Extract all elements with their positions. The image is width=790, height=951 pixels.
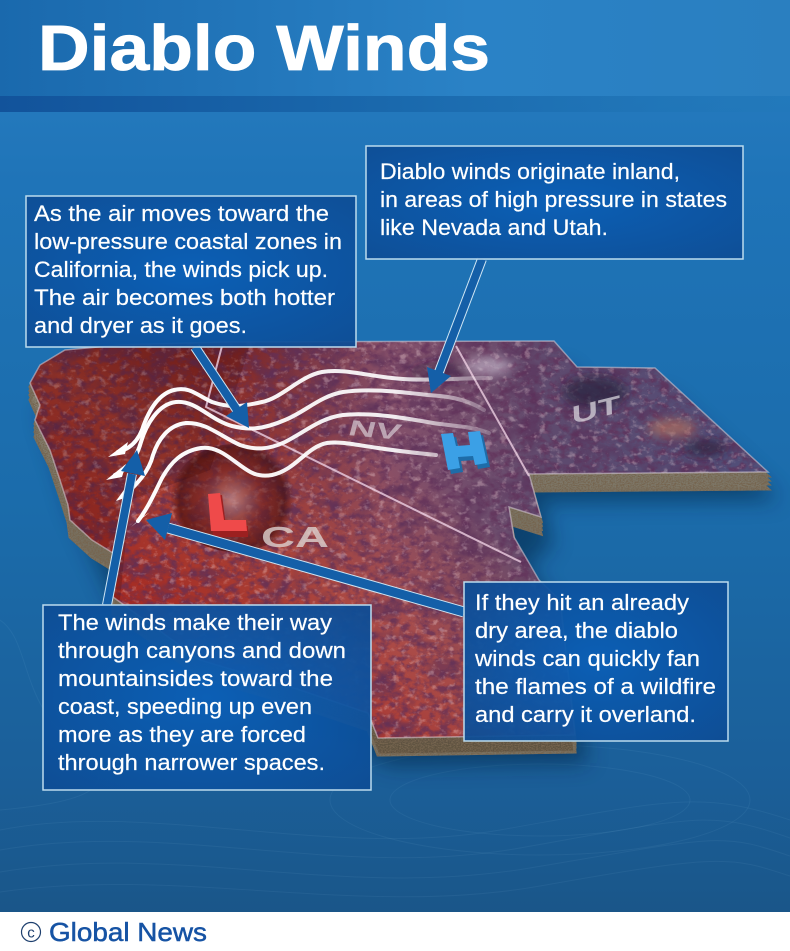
map surface edge highlight [30, 341, 768, 738]
copyright icon: c [27, 924, 35, 942]
copyright icon [22, 922, 40, 942]
map side wall [30, 345, 768, 755]
header band [0, 0, 790, 96]
wind arrowheads [106, 442, 150, 527]
arrow: coastal box to mid flow [195, 347, 249, 428]
callout: wildfire: If they hit an already [475, 590, 690, 615]
title: Diablo Winds [38, 12, 490, 84]
label: CA: CA [261, 522, 329, 554]
state borders [206, 346, 529, 562]
callout: inland origin: Diablo winds originate inland, [380, 159, 680, 184]
label: UT: UT [571, 391, 621, 430]
callout: canyons: more as they are forced [58, 722, 306, 747]
callout: coastal movement: The air becomes both hotter [34, 285, 336, 310]
footer [0, 912, 790, 951]
water ripples [0, 620, 790, 897]
callout: canyons: through canyons and down [58, 638, 346, 663]
map of California, Nevada and Utah [20, 335, 780, 755]
callout: canyons [43, 605, 371, 790]
callout: coastal movement: low-pressure coastal zones in [34, 229, 342, 254]
arrow: inland box to high pressure flow [427, 259, 482, 393]
callout: coastal movement: As the air moves toward the [34, 201, 329, 226]
callout: wildfire: the flames of a wildfire [475, 674, 716, 699]
Global News credit: Global News [49, 917, 207, 947]
callout: inland origin: in areas of high pressure in states [380, 187, 727, 212]
callout: coastal movement: California, the winds pick up. [34, 257, 328, 282]
map shadow [42, 369, 780, 766]
callout: inland origin [366, 146, 743, 259]
wind lines [115, 371, 491, 521]
callout: inland origin: like Nevada and Utah. [380, 215, 608, 240]
map surface [20, 335, 780, 745]
callout: canyons: coast, speeding up even [58, 694, 312, 719]
callout: canyons: through narrower spaces. [58, 750, 325, 775]
arrow: canyons box to coast [107, 450, 145, 605]
callout: coastal movement: and dryer as it goes. [34, 313, 247, 338]
callout: wildfire [464, 582, 728, 741]
callout: canyons: mountainsides toward the [58, 666, 333, 691]
arrow: wildfire box to coast [146, 513, 464, 612]
callout: canyons: The winds make their way [58, 610, 333, 635]
label: NV: NV [346, 416, 404, 444]
callout: wildfire: and carry it overland. [475, 702, 696, 727]
callout: coastal movement [26, 196, 356, 347]
high pressure H [441, 431, 490, 474]
low pressure L [208, 493, 248, 537]
callout: wildfire: dry area, the diablo [475, 618, 678, 643]
header accent bar [0, 96, 790, 112]
callout: wildfire: winds can quickly fan [474, 646, 700, 671]
